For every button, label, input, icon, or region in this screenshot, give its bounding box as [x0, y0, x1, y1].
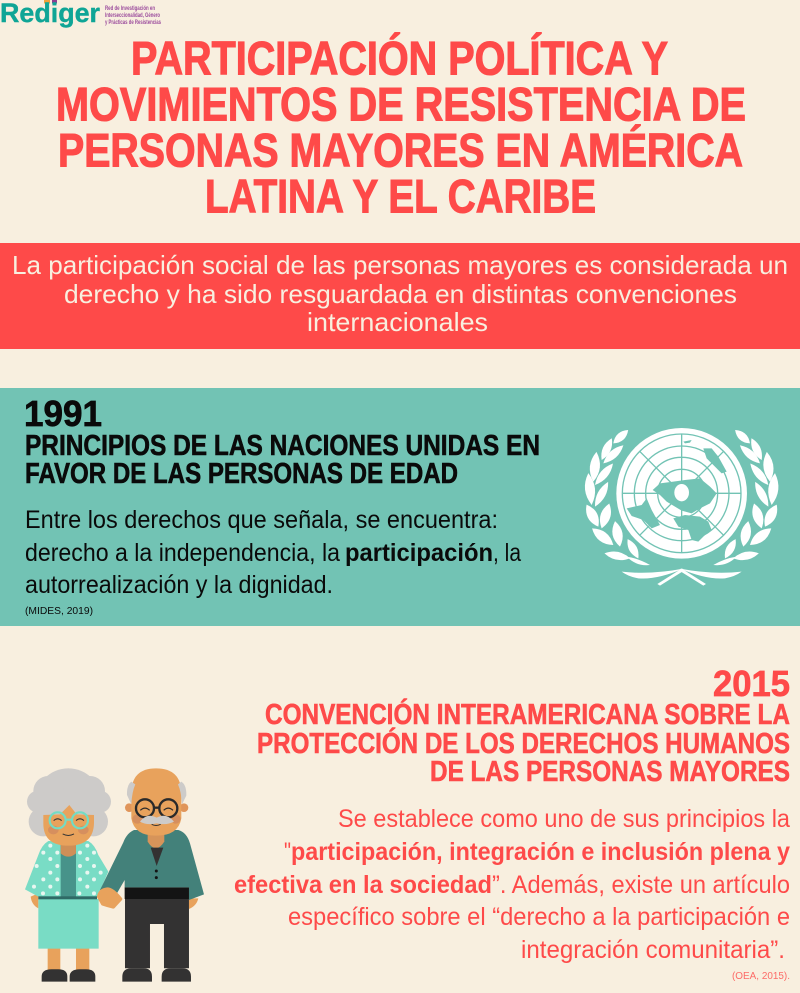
intro text: internacionales	[307, 307, 488, 337]
body text 1991: participación	[345, 539, 493, 567]
logo: Rediger	[0, 0, 161, 28]
year 2015: 2015	[713, 663, 790, 704]
body text 1991: Entre los derechos que señala, se encuentra:	[25, 506, 498, 534]
source 1991: (MIDES, 2019)	[25, 606, 93, 617]
panel: 1991	[0, 388, 800, 626]
logo: Rediger: y Prácticas de Resistencias	[105, 20, 161, 26]
year 1991: 1991	[24, 393, 102, 434]
body text 1991: derecho a la independencia, la	[25, 539, 340, 567]
heading 1991: PRINCIPIOS DE LAS NACIONES UNIDAS EN	[25, 430, 540, 462]
body text 2015: ”. Además, existe un artículo	[492, 871, 790, 899]
title: PARTICIPACIÓN POLÍTICA Y	[131, 32, 668, 84]
logo: Rediger: Red de Investigación en	[105, 6, 155, 12]
heading 1991	[25, 430, 540, 490]
body text 2015	[234, 805, 790, 964]
body text 1991: autorrealización y la dignidad.	[25, 571, 333, 599]
body text 1991	[25, 506, 521, 599]
title	[56, 32, 746, 222]
heading 1991: FAVOR DE LAS PERSONAS DE EDAD	[25, 458, 458, 490]
illustration: elderly couple	[25, 768, 204, 982]
body text 2015: integración comunitaria”.	[521, 936, 785, 964]
title: LATINA Y EL CARIBE	[205, 170, 596, 222]
grandfather	[99, 768, 204, 982]
panel: intro band	[0, 243, 800, 349]
icon: UN emblem	[582, 427, 781, 586]
grandmother	[25, 768, 111, 982]
laurel wreath right	[678, 427, 781, 586]
body text 2015: efectiva en la sociedad	[234, 871, 492, 899]
body text 2015: "	[284, 838, 291, 866]
logo: Rediger: Interseccionalidad, Género	[105, 13, 160, 19]
body text 1991: , la	[493, 539, 521, 567]
intro text	[12, 250, 788, 337]
laurel wreath left	[582, 427, 685, 586]
intro text: La participación social de las personas mayores es considerada un	[12, 250, 788, 280]
intro text: derecho y ha sido resguardada en distintas convenciones	[64, 279, 737, 309]
source 2015: (OEA, 2015).	[732, 971, 790, 982]
heading 2015	[257, 699, 790, 788]
